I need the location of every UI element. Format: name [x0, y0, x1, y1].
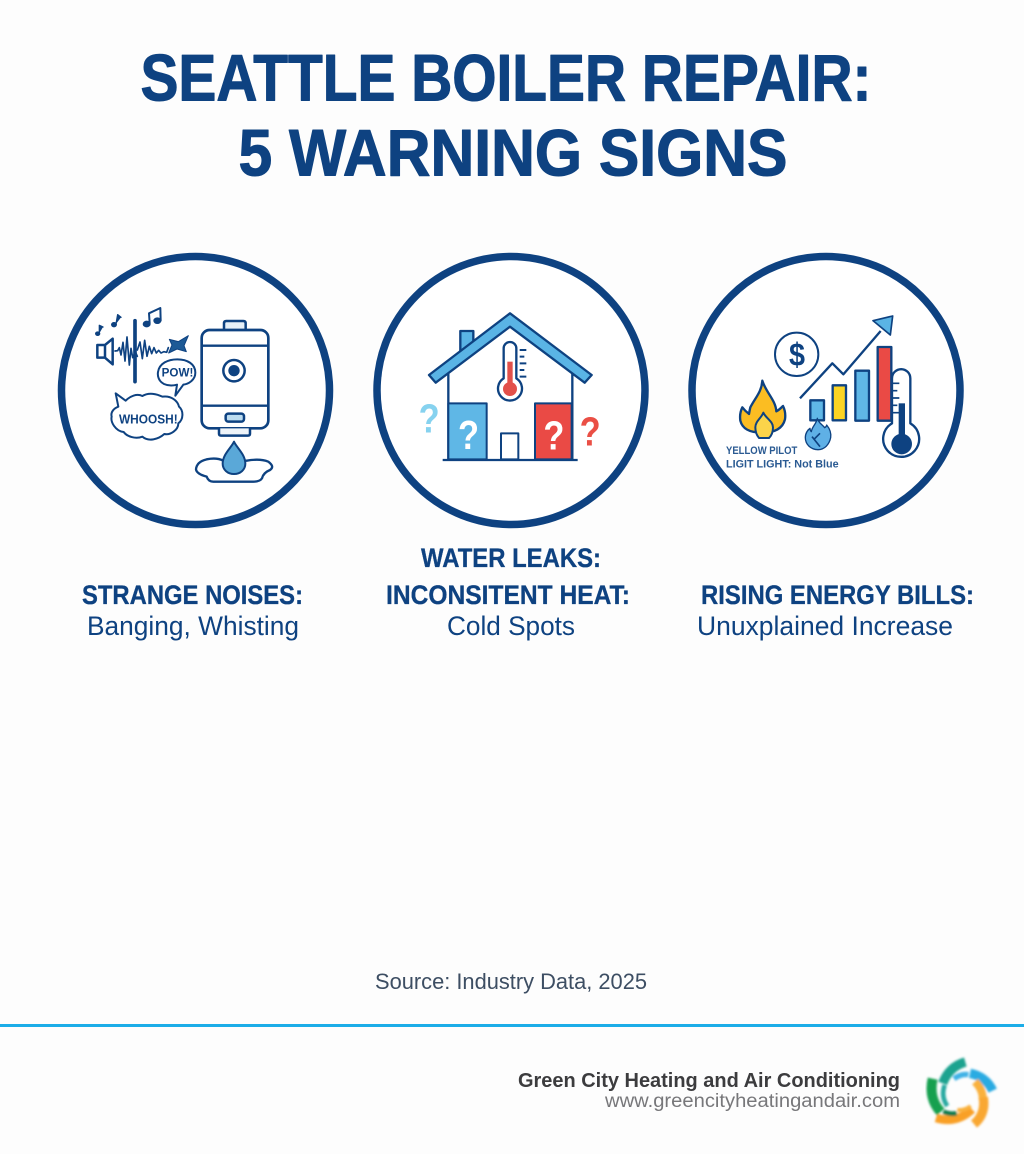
warm room: [535, 403, 572, 459]
panel: strange noises: [62, 256, 330, 524]
question marks: ?: [543, 413, 564, 459]
icon: roof: [429, 313, 592, 383]
callout: POW: POW!: [162, 366, 193, 380]
icon: yellow flame: [740, 381, 785, 438]
flame caption: [726, 445, 839, 470]
label: strange noises: [82, 580, 303, 641]
label: water leaks and inconsistent heat: [386, 543, 630, 641]
source note: Source: Industry Data, 2025: [375, 969, 647, 994]
question marks: ?: [458, 412, 479, 458]
icon: thermometer: [498, 342, 526, 401]
label: rising energy bills: Unuxplained Increase: [697, 611, 953, 641]
icon: sound wave: [115, 337, 168, 365]
label: strange noises: Banging, Whisting: [87, 611, 299, 641]
label: water leaks and inconsistent heat: Cold Spots: [447, 611, 575, 641]
callout: WHOOSH: [111, 393, 182, 440]
icon: company logo: [932, 1062, 993, 1124]
label: water leaks and inconsistent heat: INCONSITENT HEAT:: [386, 580, 630, 610]
icon: noises and boiler: [96, 308, 272, 482]
icon: boiler: [202, 321, 268, 436]
title: [140, 40, 872, 190]
footer company name: Green City Heating and Air Conditioning: [518, 1070, 900, 1092]
cold room: [448, 403, 487, 459]
icon: puddle and drop: [196, 442, 272, 482]
title: SEATTLE BOILER REPAIR:: [140, 40, 872, 114]
label: rising energy bills: [697, 580, 974, 641]
label: water leaks and inconsistent heat: WATER LEAKS:: [421, 543, 601, 573]
icon: speaker: [97, 339, 113, 364]
question marks: ?: [419, 395, 440, 441]
icon: chimney: [460, 331, 473, 353]
bar chart: [810, 347, 891, 421]
flame caption: LIGIT LIGHT: Not Blue: [726, 458, 839, 470]
icon: music notes: [96, 308, 161, 335]
icon: thermometer: [883, 369, 919, 457]
question marks: ?: [580, 409, 601, 455]
panel: inconsistent heat: [377, 256, 645, 524]
label: strange noises: STRANGE NOISES:: [82, 580, 303, 610]
icon: blue flame: [805, 418, 831, 450]
footer website: www.greencityheatingandair.com: [604, 1091, 900, 1112]
icon ring: inconsistent heat: [377, 256, 645, 524]
icon: sound spike: [129, 321, 140, 382]
icon: energy costs: [726, 316, 919, 470]
icon: house with thermometer: [419, 313, 601, 460]
icon: dollar coin: [775, 333, 818, 376]
flame caption: YELLOW PILOT: [726, 445, 798, 457]
arrow: [800, 316, 893, 398]
icon: door: [501, 433, 518, 459]
icon ring: rising energy bills: [692, 256, 960, 524]
callout: POW: [158, 359, 195, 396]
icon: impact star: [169, 336, 188, 353]
icon ring: strange noises: [62, 256, 330, 524]
question marks: [419, 395, 601, 459]
label: rising energy bills: RISING ENERGY BILLS:: [701, 580, 974, 610]
callout: WHOOSH: WHOOSH!: [119, 412, 178, 427]
icon: dollar coin: $: [789, 337, 805, 373]
panel: rising energy bills: [692, 256, 960, 524]
icon: house walls: [443, 373, 578, 460]
title: 5 WARNING SIGNS: [238, 116, 788, 190]
